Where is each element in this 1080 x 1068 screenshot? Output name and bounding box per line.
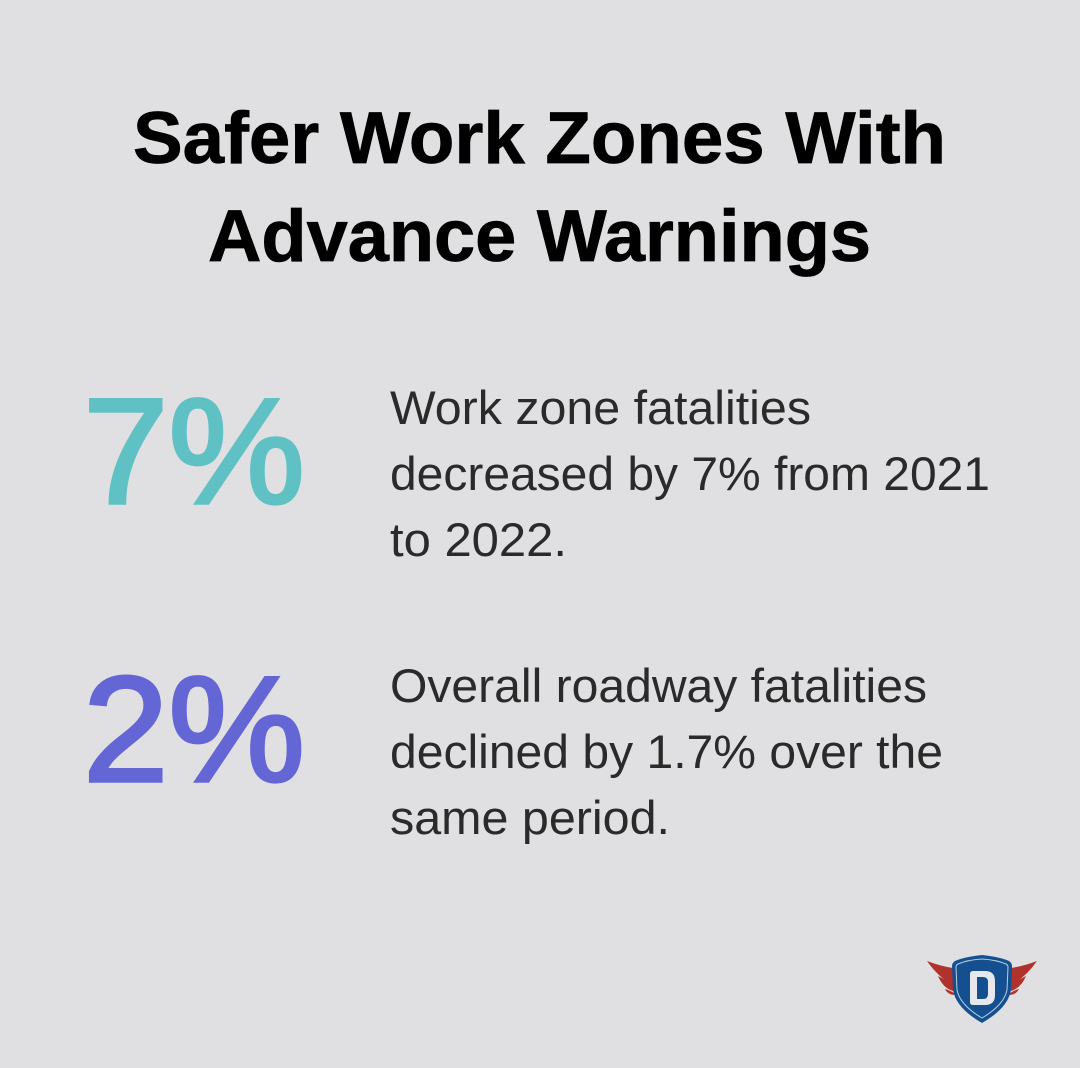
stat number 2%: 2% (83, 645, 305, 813)
stat text: overall roadway fatalities: same period. (390, 791, 670, 844)
stat: 7% (83, 367, 990, 566)
stat text: work zone fatalities: to 2022. (390, 513, 567, 566)
title: Advance Warnings (208, 196, 871, 277)
stat text: overall roadway fatalities: declined by 1.7% over the (390, 725, 943, 778)
stat number 7%: 7% (83, 367, 305, 535)
stat text: overall roadway fatalities: Overall roadway fatalities (390, 659, 927, 712)
stat text: work zone fatalities: decreased by 7% from 2021 (390, 447, 990, 500)
title: Safer Work Zones With (133, 98, 946, 179)
icon: shield logo with wings (927, 955, 1037, 1023)
title (133, 98, 946, 277)
stat text: work zone fatalities (390, 381, 990, 566)
stat text: overall roadway fatalities (390, 659, 943, 844)
stat: 2% (83, 645, 943, 844)
stat text: work zone fatalities: Work zone fatalities (390, 381, 811, 434)
